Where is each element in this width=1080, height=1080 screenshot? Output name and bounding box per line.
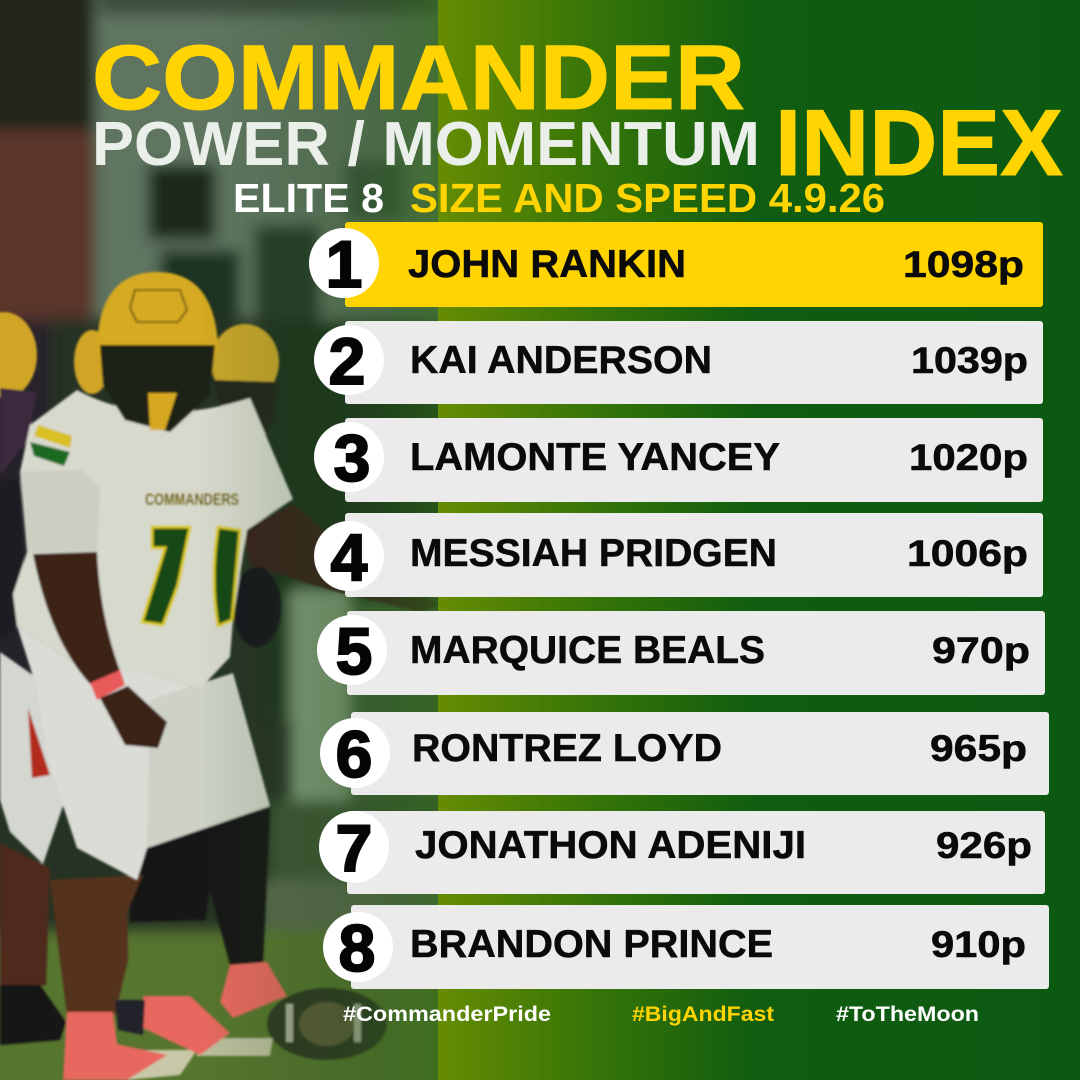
subheading: Elite 8: ELITE 8 [233,175,384,221]
left arm [33,552,123,684]
rank row 4: Messiah Pridgen [314,513,1043,597]
rank row 8: Brandon Prince: 910p [931,924,1026,965]
title: INDEX: INDEX [775,90,1063,195]
pants [17,626,270,880]
rank row 5: Marquice Beals [317,611,1045,695]
wristband [90,670,125,700]
football [267,988,387,1060]
rank row 4: Messiah Pridgen: 1006p [907,533,1028,574]
near leg [50,875,143,1015]
rank row 6: Rontrez Loyd: 965p [930,728,1027,769]
back helmets [211,324,279,400]
title: COMMANDER: COMMANDER [92,27,745,129]
hashtag: CommanderPride: #CommanderPride [343,1003,551,1026]
rank row 5: Marquice Beals: 970p [932,630,1030,671]
rank row 7: Jonathon Adeniji: 7 [336,811,372,885]
rank row 6: Rontrez Loyd: RONTREZ LOYD [412,727,722,770]
hashtag: BigAndFast: #BigAndFast [632,1003,774,1026]
rank row 4: Messiah Pridgen: 4 [331,520,368,594]
rank row 1: John Rankin: 1098p [903,244,1024,285]
far leg [130,806,270,965]
jersey wordmark: COMMANDERS [145,490,239,509]
rank row 6: Rontrez Loyd [320,712,1049,795]
rank row 3: Lamonte Yancey: LAMONTE YANCEY [410,436,780,479]
rank row 2: Kai Anderson: KAI ANDERSON [410,339,712,382]
rank row 1: John Rankin: 1 [326,227,362,301]
rank row 5: Marquice Beals: 5 [336,614,372,688]
rank row 8: Brandon Prince [323,905,1049,989]
jersey number [142,527,190,625]
rank row 1: John Rankin [309,222,1043,307]
hand [100,686,167,748]
rank row 1: John Rankin: JOHN RANKIN [408,243,686,286]
rank row 7: Jonathon Adeniji: 926p [936,825,1032,866]
rank row 2: Kai Anderson [314,321,1043,404]
subheading: size and speed date: SIZE AND SPEED 4.9.26 [410,175,885,221]
jersey [13,390,293,689]
rank row 2: Kai Anderson: 1039p [911,340,1028,381]
rank row 7: Jonathon Adeniji: JONATHON ADENIJI [415,824,806,867]
rank row 8: Brandon Prince: BRANDON PRINCE [410,923,773,966]
background photo: football player [0,0,475,1080]
rank row 3: Lamonte Yancey [314,418,1043,502]
right arm [243,504,440,612]
socks and cleats [127,1050,197,1080]
rank row 4: Messiah Pridgen: MESSIAH PRIDGEN [410,532,777,575]
background: green gradient panel [438,0,1080,1080]
back player's pants [0,652,63,864]
hashtag: ToTheMoon: #ToTheMoon [836,1003,979,1026]
rank row 6: Rontrez Loyd: 6 [336,717,372,791]
rank row 7: Jonathon Adeniji [319,811,1045,894]
rank row 5: Marquice Beals: MARQUICE BEALS [410,629,765,672]
rank row 3: Lamonte Yancey: 1020p [909,437,1028,478]
glove [233,567,281,647]
subtitle: POWER / MOMENTUM: POWER / MOMENTUM [92,110,760,179]
rank row 2: Kai Anderson: 2 [329,324,365,398]
rank row 3: Lamonte Yancey: 3 [334,421,370,495]
helmet [97,272,218,360]
rank row 8: Brandon Prince: 8 [339,911,375,985]
